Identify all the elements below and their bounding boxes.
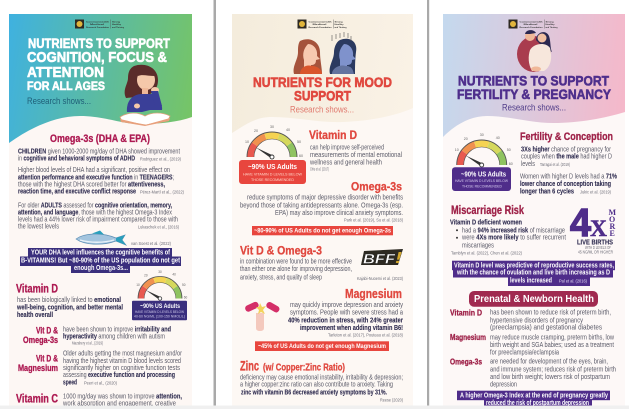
section: magnesium: 40% reduction in stress, with 24% greater [288,315,403,324]
section: vitamin C: Vitamin C [16,394,58,406]
section: vit D and magnesium: assessing executive function and processing [63,370,175,379]
section: vit D and omega-3: in combination were found to be more effective [240,257,352,266]
callout: 90 percent of US adults: ~90% US Adults [461,172,506,179]
title: SUPPORT [294,88,351,104]
section: vit D and magnesium: speed [63,377,77,386]
section: omega-3s: CHILDREN given 1000-2000 mg/day of DHA showed improvement [18,146,180,156]
row: vitamin D: hypertensive disorders of pregnancy [490,315,583,324]
section: vit D and omega-3s [23,326,171,346]
section: magnesium: may quickly improve depression and anxiety [290,300,403,309]
row: vitamin D: Vitamin D [450,307,482,317]
section: omega-3s: the lowest levels [18,222,59,230]
section: fertility and conception: longer than 6 cycles [520,186,574,195]
section: vitamin C: work absorption and engagement, creative [62,398,176,408]
section: omega-3s: reaction time, and executive conflict response [18,186,136,196]
section: vitamin D: wellness and general health [309,158,382,167]
icon: magnesium pill breaking [244,301,281,331]
row: omega-3s [450,356,616,389]
row: magnesium [450,332,615,356]
callout: 90 percent of US adults [239,160,306,184]
section: vit D and omega-3 [240,243,403,282]
section: zinc: zinc with vitamin B6 decreased anxiety symptoms by 31%. [241,387,387,396]
research shows subheading: Research shows... [290,105,354,116]
row: magnesium: for preeclampsia/eclampsia [490,347,560,356]
stat: 4X more live births: R [610,222,616,231]
title [27,36,171,93]
section: fertility and conception [520,131,617,195]
stat: 4X more live births: M [608,208,616,217]
title: NUTRIENTS TO SUPPORT [28,36,171,51]
section: zinc: Reese (2020) [380,397,403,403]
callout: 90 percent of US adults: THOSE RECOMMENDED [251,178,294,182]
section: omega-3s [240,179,403,224]
section: vitamin D: Vitamin D [16,284,58,296]
icon: BFF badge: ! [395,250,403,267]
callout: 90 percent of US adults: HAVE VITAMIN D LEVELS BELOW [135,310,185,314]
panel: cognition, focus and attention [9,14,192,409]
logo [298,20,347,29]
section: vit D and magnesium: significantly higher on cognitive function tests [63,363,180,372]
section: omega-3s: beyond those of taking antidepressants alone. Omega-3s (esp. [240,200,403,209]
callout: 90 percent of US adults: ~90% US Adults [140,303,180,310]
stat: 4X more live births: 4 [570,202,591,245]
heading: prenatal and newborn health: Prenatal & Newborn Health [474,293,594,305]
section: vit D and omega-3s: Omega-3s [23,335,58,345]
section: vit D and omega-3: Vit D & Omega-3 [240,243,322,257]
section: miscarriage risk [450,205,566,256]
section: zinc: a higher copper:zinc ratio can also contribute to anxiety. Taking [240,380,393,389]
stat: 4X more live births: LIVE BIRTHS [577,237,613,246]
icon: two women, calm and distressed [294,32,356,74]
section: omega-3s: Omega-3s (DHA & EPA) [50,133,150,145]
title [458,76,612,100]
section: omega-3s: Park et al. (2019), Su et al. (2018) [344,218,403,224]
callout: reproductive success [452,261,615,286]
heading: prenatal and newborn health [469,291,598,307]
row: omega-3s: Omega-3s [450,356,482,366]
section: omega-3s: reduce symptoms of major depressive disorder with benefits [247,193,403,202]
section: fertility and conception: Jukic et al. (2019) [580,189,611,195]
section: magnesium: Magnesium [345,286,402,301]
callout: DHA and B-vitamins: B-VITAMINS! But ~80-90% of the US population do not get [21,256,180,264]
section: miscarriage risk: miscarriages [462,240,494,249]
icon: girl reading a book [120,65,170,126]
section: vitamin D [16,284,123,319]
section: vit D and magnesium: Peeri et al., (2020) [84,380,117,386]
section: vit D and omega-3s: hyperactivity among children with autism [63,332,165,341]
section: omega-3s: For older ADULTS assessed for cognitive orientation, memory, [18,200,172,210]
section: omega-3s: EPA) may also improve clinical anxiety symptoms. [275,208,403,217]
callout: omega-3 shortfall [252,226,393,235]
section: omega-3s: Rodriguez et al., (2019) [140,156,181,162]
row: vitamin D [450,307,611,332]
section: vitamin D: Chiu et al. (2017) [310,166,329,172]
section: zinc: deficiency may cause emotional instability, irritability & depression; [240,372,403,381]
section: magnesium: symptoms. People with severe stress had a [290,308,404,317]
section: zinc [240,359,403,403]
section: miscarriage risk: Vitamin D deficient women [450,218,522,227]
title: COGNITION, FOCUS & [27,50,167,66]
callout: 90 percent of US adults [452,167,511,191]
section: vit D and omega-3s: Mazahery et al., (2019) [72,341,103,347]
section: fertility and conception: 3Xs higher chance of pregnancy for [521,144,611,153]
section: fertility and conception: Women with higher D levels had a 71% [520,171,617,180]
section: miscarriage risk: had a 94% increased risk of miscarriage [462,225,565,234]
section: miscarriage risk: Miscarriage Risk [451,205,524,217]
gauge: vitamin D levels [136,270,188,300]
callout: 90 percent of US adults: HAVE VITAMIN D LEVELS BELOW [243,172,302,176]
section: omega-3s: levels had a 44% lower risk of impairment compared to those with [18,214,178,224]
section: vitamin D: measurements of mental emotional [310,150,402,159]
callout: 90 percent of US adults: 40-60 NG/ML (100-150 NMOL/L) [134,315,185,319]
callout: omega-3 index and postpartum depression [457,391,610,407]
section: magnesium: Tarleton et al. (2017), Pouteau et al. (2018) [328,333,403,339]
section: miscarriage risk: were 4Xs more likely to suffer recurrent [461,233,566,242]
icon: expectant couple [517,30,552,72]
section: vit D and magnesium: having the highest vitamin D blood levels scored [63,356,181,365]
section: vit D and omega-3: than either one alone for improving depression, [240,264,352,273]
callout: 90 percent of US adults: ~90% US Adults [248,164,297,171]
callout: 90 percent of US adults: HAVE VITAMIN D LEVELS BELOW [455,179,509,183]
section: vit D and magnesium [18,349,182,386]
section: vitamin C [16,393,182,406]
section: omega-3s: Pérez-Martí et al., (2022) [140,190,184,196]
citation: van Soest et al. (2022) [131,241,171,247]
callout: magnesium shortfall [255,341,389,351]
section: omega-3s: those with the highest DHA scored better for attentiveness, [18,180,165,188]
logo [75,20,125,29]
gauge: vitamin D levels [455,133,513,167]
section: omega-3s: attention, and language, those with the highest Omega-3 Index [18,208,172,216]
section: vit D and magnesium: Vit D & [36,354,58,364]
section: vit D and omega-3: anxiety, stress, and quality of sleep [240,272,322,281]
section: vitamin D: has been biologically linked to emotional [17,295,121,304]
section: vit D and omega-3s: Vit D & [36,326,58,336]
section: vitamin D: Vitamin D [309,128,357,142]
research shows subheading: Research shows... [27,96,91,107]
section: omega-3s: in cognitive and behavioral symptoms of ADHD [18,154,135,162]
section: miscarriage risk: Tamblyn et al. (2022), Chen et al. (2022) [451,250,522,256]
section: zinc: (w/ Copper:Zinc Ratio) [263,363,345,374]
logo [508,20,558,29]
panel: mood support [232,14,413,409]
section: vitamin D: well-being, cognition, and better mental [16,302,123,312]
section: vitamin D [309,128,402,172]
callout: DHA and B-vitamins [20,248,181,273]
icon: BFF badge: BFF [363,250,396,266]
section: vitamin C: 1000 mg/day was shown to improve attention, [63,391,182,400]
stat: 4X more live births [570,202,616,256]
section: magnesium: improvement when adding vitamin B6! [300,323,403,332]
gauge: vitamin D levels [245,125,303,159]
panel: fertility and pregnancy [443,14,625,409]
section: vitamin D: can help improve self-perceived [310,142,384,152]
row: vitamin D: (preeclampsia) and gestational diabetes [490,323,602,332]
section: vit D and magnesium: Older adults getting the most magnesium and/or [63,349,182,358]
stat: 4X more live births: O [609,215,615,224]
callout: DHA and B-vitamins: YOUR DHA level influences the cognitive benefits of [31,248,170,256]
section: omega-3s: Higher blood levels of DHA had a significant, positive effect on [18,165,170,174]
callout: reproductive success: Pal et al. (2016) [559,278,587,283]
title [254,77,392,101]
section: vit D and magnesium: Magnesium [18,363,58,373]
callout: omega-3 index and postpartum depression: reduced the risk of postpartum depression [486,400,589,407]
section: vitamin D: health overall [17,310,53,319]
section: fertility and conception: couples when the male had higher D [521,152,612,161]
row: omega-3s: depression [490,380,517,389]
title: NUTRIENTS TO SUPPORT [458,73,609,89]
research shows subheading: Research shows... [502,102,566,113]
section: omega-3s: attention performance and executive function in TEENAGERS; [18,172,174,182]
stat: 4X more live births: X [590,216,607,241]
callout: magnesium shortfall: ~45% of US Adults do not get enough Magnesium [258,343,386,350]
title: NUTRIENTS FOR MOOD [253,74,392,90]
icon: fish [76,230,126,245]
section: fertility and conception: Tarragai et al. (2019) [540,162,570,168]
section: omega-3s: Lukaschek et al., (2016) [138,224,179,230]
callout: 90 percent of US adults [132,301,187,320]
section: omega-3s [18,133,184,230]
title: ATTENTION [27,65,104,81]
callout: reproductive success: levels increased [510,277,552,284]
stat: 4X more live births: E [610,229,615,238]
section: vit D and omega-3s: have been shown to improve irritability and [63,324,171,334]
callout: omega-3 shortfall: ~80-90% of US Adults do not get enough Omega-3s [254,228,391,234]
icon: BFF badge [361,249,403,265]
stat: 4X more live births: 45 NG/ML OR HIGHER [578,250,613,256]
section: zinc: Zinc [240,359,259,374]
title: FOR ALL AGES [27,81,105,93]
callout: DHA and B-vitamins: enough Omega-3s... [74,263,128,272]
section: omega-3s: Omega-3s [351,179,402,193]
row: magnesium: Magnesium [450,332,486,342]
stat: 4X more live births: WITH D LEVELS OF [585,245,611,251]
section: magnesium [288,286,404,339]
callout: 90 percent of US adults: THOSE RECOMMENDED [462,184,502,188]
section: vit D and omega-3: Kajabi-Nuoemi et al. (2023) [357,276,403,282]
section: fertility and conception: levels [521,159,535,168]
